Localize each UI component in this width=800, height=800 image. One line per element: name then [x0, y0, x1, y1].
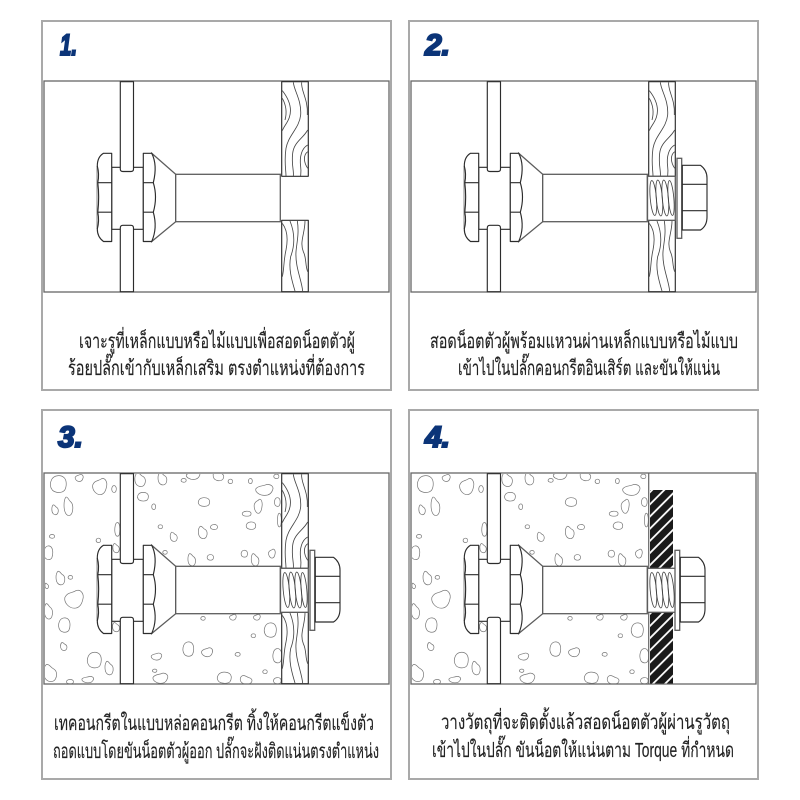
- caption 1: เจาะรูที่เหล็กแบบหรือไม้แบบเพื่อสอดน็อตตัวผู้: [79, 327, 355, 354]
- step number 1: 1.: [60, 29, 77, 62]
- caption 3: ถอดแบบโดยขันน็อตตัวผู้ออก ปลั๊กจะฝังติดแน่นตรงตำแหน่ง: [53, 736, 379, 764]
- step number 2: 2.: [424, 29, 450, 62]
- caption 2: [430, 327, 738, 380]
- caption 1: [68, 327, 365, 380]
- panel 1: [42, 21, 391, 390]
- diagram 4: fasten object: [411, 471, 756, 684]
- panel 3 border: [42, 410, 391, 779]
- caption 3: [53, 708, 379, 764]
- panel 2 border: [409, 21, 758, 390]
- panel 4 border: [409, 410, 758, 779]
- caption 4: [432, 707, 734, 762]
- step number 4: 4.: [424, 421, 450, 454]
- step number 3: 3.: [58, 421, 83, 454]
- panel 3: [42, 410, 391, 779]
- panel 4: [409, 410, 758, 779]
- panel 2: [409, 21, 758, 390]
- diagram 3: pour concrete: [44, 471, 389, 684]
- panel 1 border: [42, 21, 391, 390]
- caption 1: ร้อยปลั๊กเข้ากับเหล็กเสริม ตรงตำแหน่งที่ต้องการ: [68, 353, 365, 380]
- diagram 1: drill formwork: [44, 81, 389, 292]
- caption 3: เทคอนกรีตในแบบหล่อคอนกรีต ทิ้งให้คอนกรีตแข็งตัว: [54, 708, 374, 735]
- diagram 2: bolt through formwork: [411, 81, 756, 292]
